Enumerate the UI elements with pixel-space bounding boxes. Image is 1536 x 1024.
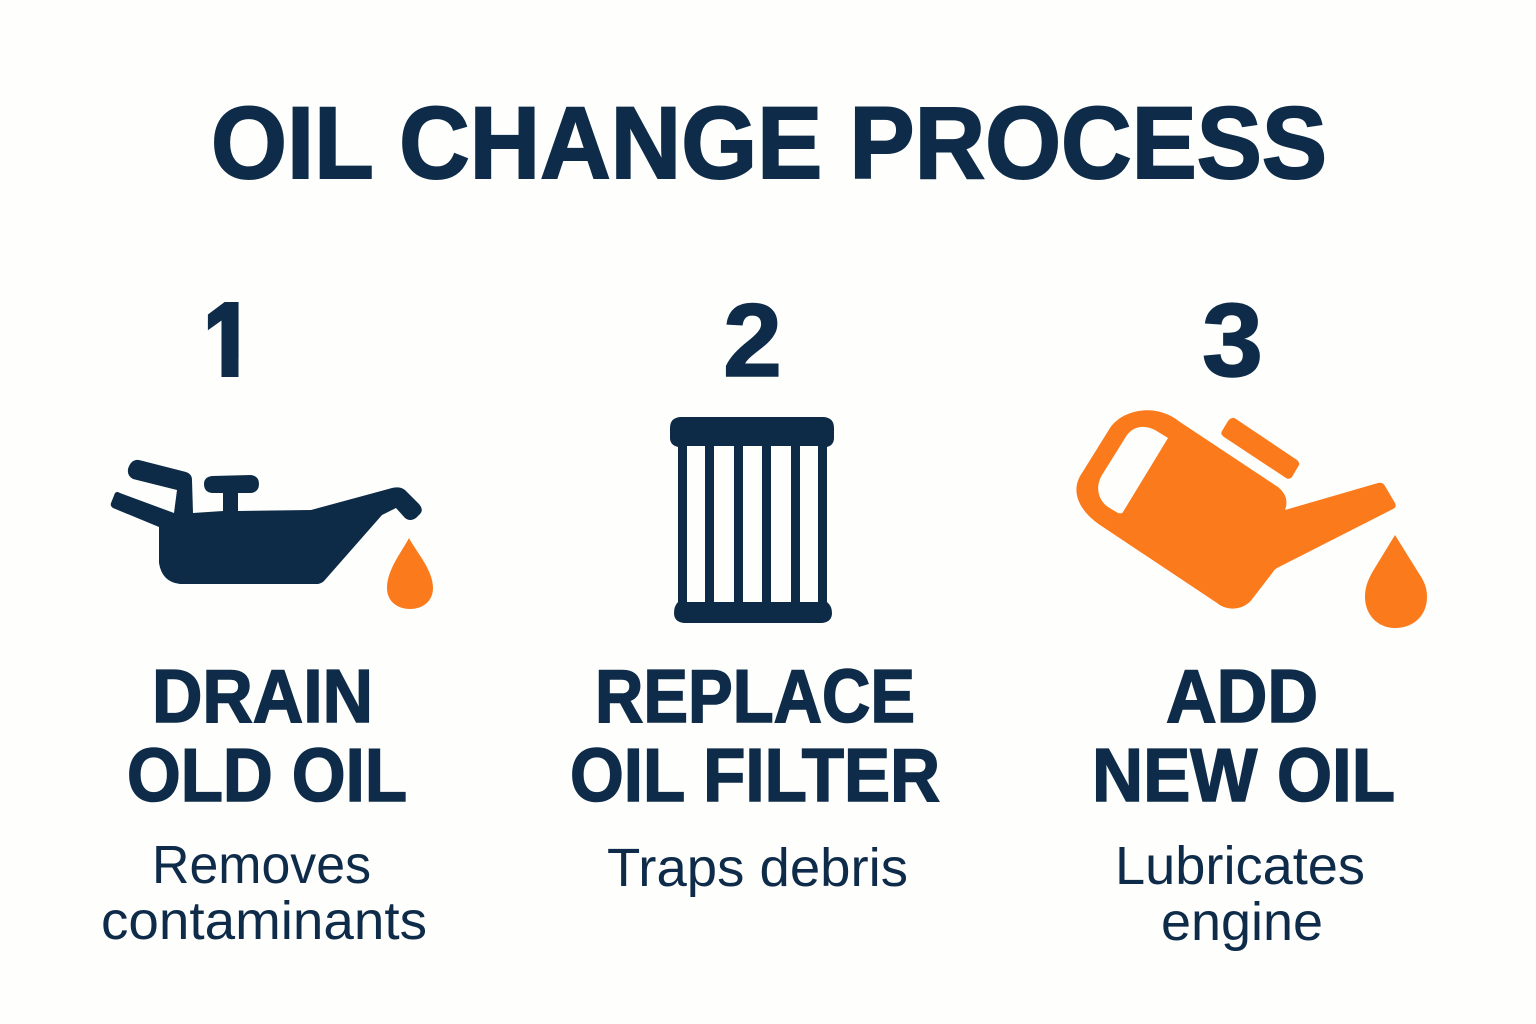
description: traps debris: Traps debris xyxy=(607,838,908,898)
step number 1: 1 xyxy=(204,282,254,397)
description: lubricates engine: Lubricates xyxy=(1115,836,1365,896)
panel: step 1 drain old oil xyxy=(101,282,433,951)
description: removes contaminants: contaminants xyxy=(101,891,427,951)
heading: drain old oil: DRAIN xyxy=(152,654,373,738)
panel: step 3 add new oil xyxy=(1076,283,1427,952)
description: lubricates engine xyxy=(1115,836,1365,952)
heading: add new oil: NEW OIL xyxy=(1092,733,1395,817)
heading: replace oil filter xyxy=(570,654,940,817)
heading: add new oil xyxy=(1092,654,1395,817)
heading: drain old oil xyxy=(127,654,407,817)
heading: add new oil: ADD xyxy=(1166,654,1318,738)
icon: orange oil drop xyxy=(387,538,433,609)
description: lubricates engine: engine xyxy=(1161,892,1323,952)
step number 3: 3 xyxy=(1202,283,1263,399)
title: OIL CHANGE PROCESS xyxy=(211,86,1327,200)
panel: step 2 replace oil filter xyxy=(570,283,940,898)
icon: orange oil drop xyxy=(1365,535,1427,628)
icon: oil filter xyxy=(670,417,834,623)
heading: drain old oil: OLD OIL xyxy=(127,733,407,817)
icon: oil jug pouring xyxy=(1076,410,1396,609)
description: removes contaminants xyxy=(101,835,427,951)
step number 2: 2 xyxy=(723,283,782,399)
heading: replace oil filter: OIL FILTER xyxy=(570,733,940,817)
heading: replace oil filter: REPLACE xyxy=(595,654,915,738)
description: removes contaminants: Removes xyxy=(152,835,371,895)
icon: oil pan with spout xyxy=(111,460,422,584)
icon: jug cap xyxy=(1221,418,1299,479)
